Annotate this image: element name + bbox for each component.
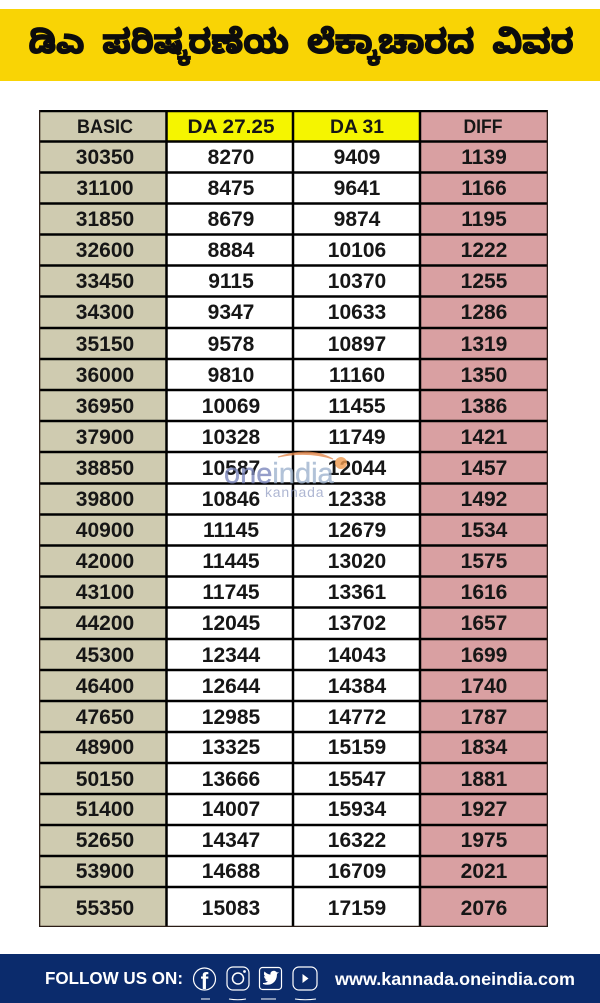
row 50150: 15547: [328, 768, 386, 791]
title banner: [0, 9, 600, 81]
row 55350: 15083: [202, 897, 260, 920]
row 45300: 12344: [202, 644, 261, 667]
website url: www.kannada.oneindia.com: [334, 969, 575, 989]
row 44200: 44200: [76, 612, 134, 635]
row 30350: 30350: [76, 146, 134, 169]
row 40900: 1534: [461, 519, 508, 542]
row 38850: 10587: [202, 457, 260, 480]
row 44200: [76, 612, 507, 635]
row 34300: 9347: [208, 301, 254, 324]
row 40900: 12679: [328, 519, 386, 542]
row 42000: [76, 550, 508, 573]
row 51400: 1927: [461, 798, 507, 821]
row 43100: 1616: [461, 581, 507, 604]
icon: youtube: [293, 967, 317, 990]
row 51400: [76, 798, 507, 821]
row 55350: 55350: [76, 897, 134, 920]
icon: facebook: [194, 968, 216, 994]
row 55350: 17159: [328, 897, 386, 920]
row 39800: [76, 488, 507, 511]
row 42000: 13020: [328, 550, 386, 573]
row 45300: 1699: [461, 644, 507, 667]
row 52650: 52650: [76, 829, 134, 852]
row 31850: 31850: [76, 208, 134, 231]
row 46400: 14384: [328, 675, 387, 698]
row 32600: 1222: [461, 239, 507, 262]
row 51400: 15934: [328, 798, 387, 821]
row 35150: 35150: [76, 333, 134, 356]
row 35150: [76, 333, 507, 356]
row 30350: [76, 146, 507, 169]
row 48900: 48900: [76, 736, 134, 759]
row 39800: 1492: [461, 488, 507, 511]
row 36000: 9810: [208, 364, 254, 387]
row 48900: 15159: [328, 736, 386, 759]
row 42000: 11445: [202, 550, 260, 573]
row 48900: 1834: [461, 736, 508, 759]
watermark: oneindia kannada: kannada: [265, 484, 324, 500]
row 47650: [76, 706, 507, 729]
icon: twitter: [260, 968, 282, 990]
row 39800: 12338: [328, 488, 387, 511]
row 43100: 43100: [76, 581, 134, 604]
row 37900: 37900: [76, 426, 134, 449]
row 35150: 9578: [208, 333, 255, 356]
row 31850: [76, 208, 507, 231]
row 50150: 50150: [76, 768, 134, 791]
row 37900: [76, 426, 508, 449]
row 40900: 40900: [76, 519, 134, 542]
row 45300: 14043: [328, 644, 386, 667]
row 31100: 9641: [334, 177, 381, 200]
row 52650: 1975: [461, 829, 508, 852]
row 40900: 11145: [203, 519, 259, 542]
row 37900: 1421: [461, 426, 508, 449]
row 53900: [76, 860, 508, 883]
row 33450: 33450: [76, 270, 134, 293]
row 32600: 8884: [208, 239, 255, 262]
row 33450: [76, 270, 508, 293]
row 32600: 32600: [76, 239, 134, 262]
watermark: oneindia kannada: oneindia: [224, 458, 335, 490]
row 43100: [76, 581, 507, 604]
row 31100: 31100: [76, 177, 134, 200]
row 34300: 34300: [76, 301, 134, 324]
row 47650: 47650: [76, 706, 134, 729]
row 52650: 16322: [328, 829, 386, 852]
row 31100: 1166: [461, 177, 507, 200]
row 42000: 42000: [76, 550, 134, 573]
watermark: oneindia kannada: [224, 452, 347, 500]
row 31850: 8679: [208, 208, 254, 231]
row 39800: 10846: [202, 488, 260, 511]
row 50150: 13666: [202, 768, 260, 791]
row 38850: [76, 457, 507, 480]
row 36000: 36000: [76, 364, 134, 387]
row 43100: 11745: [202, 581, 260, 604]
row 36950: 1386: [461, 395, 507, 418]
table header: BASIC: [77, 117, 133, 138]
row 30350: 1139: [461, 146, 507, 169]
row 53900: 16709: [328, 860, 386, 883]
row 32600: 10106: [328, 239, 386, 262]
row 33450: 10370: [328, 270, 386, 293]
title: ಡಿಎ ಪರಿಷ್ಕರಣೆಯ ಲೆಕ್ಕಾಚಾರದ ವಿವರ: [28, 23, 574, 66]
row 34300: 1286: [461, 301, 507, 324]
row 55350: 2076: [461, 897, 507, 920]
row 55350: [76, 897, 507, 920]
row 34300: [76, 301, 507, 324]
row 53900: 2021: [461, 860, 508, 883]
row 44200: 13702: [328, 612, 386, 635]
row 46400: 46400: [76, 675, 134, 698]
row 37900: 10328: [202, 426, 261, 449]
row 46400: 12644: [202, 675, 261, 698]
row 30350: 9409: [334, 146, 380, 169]
row 33450: 1255: [461, 270, 508, 293]
row 47650: 12985: [202, 706, 261, 729]
row 33450: 9115: [208, 270, 254, 293]
row 45300: [76, 644, 507, 667]
row 36000: [76, 364, 507, 387]
row 36950: 11455: [328, 395, 386, 418]
row 48900: [76, 736, 508, 759]
table header: [77, 117, 502, 138]
row 46400: 1740: [461, 675, 507, 698]
row 53900: 53900: [76, 860, 134, 883]
row 46400: [76, 675, 507, 698]
table header: DIFF: [464, 117, 502, 138]
row 36950: 36950: [76, 395, 134, 418]
row 44200: 12045: [202, 612, 261, 635]
row 51400: 51400: [76, 798, 134, 821]
row 39800: 39800: [76, 488, 134, 511]
row 31100: [76, 177, 507, 200]
row 31100: 8475: [208, 177, 255, 200]
footer bar: [0, 954, 600, 1003]
icon: facebook: f: [201, 968, 209, 994]
row 50150: [76, 768, 508, 791]
row 35150: 10897: [328, 333, 386, 356]
row 52650: [76, 829, 508, 852]
row 40900: [76, 519, 508, 542]
row 36950: [76, 395, 507, 418]
data table: [39, 110, 548, 927]
row 38850: 38850: [76, 457, 134, 480]
table header: DA 27.25: [188, 117, 275, 138]
row 36000: 1350: [461, 364, 507, 387]
row 52650: 14347: [202, 829, 260, 852]
row 30350: 8270: [208, 146, 254, 169]
table header: DA 31: [330, 117, 384, 138]
row 38850: 12044: [328, 457, 387, 480]
row 31850: 1195: [461, 208, 507, 231]
row 38850: 1457: [461, 457, 507, 480]
row 32600: [76, 239, 507, 262]
row 45300: 45300: [76, 644, 134, 667]
follow us label: FOLLOW US ON:: [45, 968, 183, 988]
row 51400: 14007: [202, 798, 260, 821]
row 50150: 1881: [461, 768, 508, 791]
row 47650: 1787: [461, 706, 507, 729]
row 53900: 14688: [202, 860, 261, 883]
row 43100: 13361: [328, 581, 387, 604]
row 48900: 13325: [202, 736, 261, 759]
row 47650: 14772: [328, 706, 386, 729]
row 31850: 9874: [334, 208, 381, 231]
row 37900: 11749: [328, 426, 386, 449]
row 44200: 1657: [461, 612, 507, 635]
row 34300: 10633: [328, 301, 386, 324]
row 42000: 1575: [461, 550, 508, 573]
row 36000: 11160: [329, 364, 385, 387]
row 35150: 1319: [461, 333, 507, 356]
row 36950: 10069: [202, 395, 260, 418]
icon: instagram: [227, 967, 249, 990]
